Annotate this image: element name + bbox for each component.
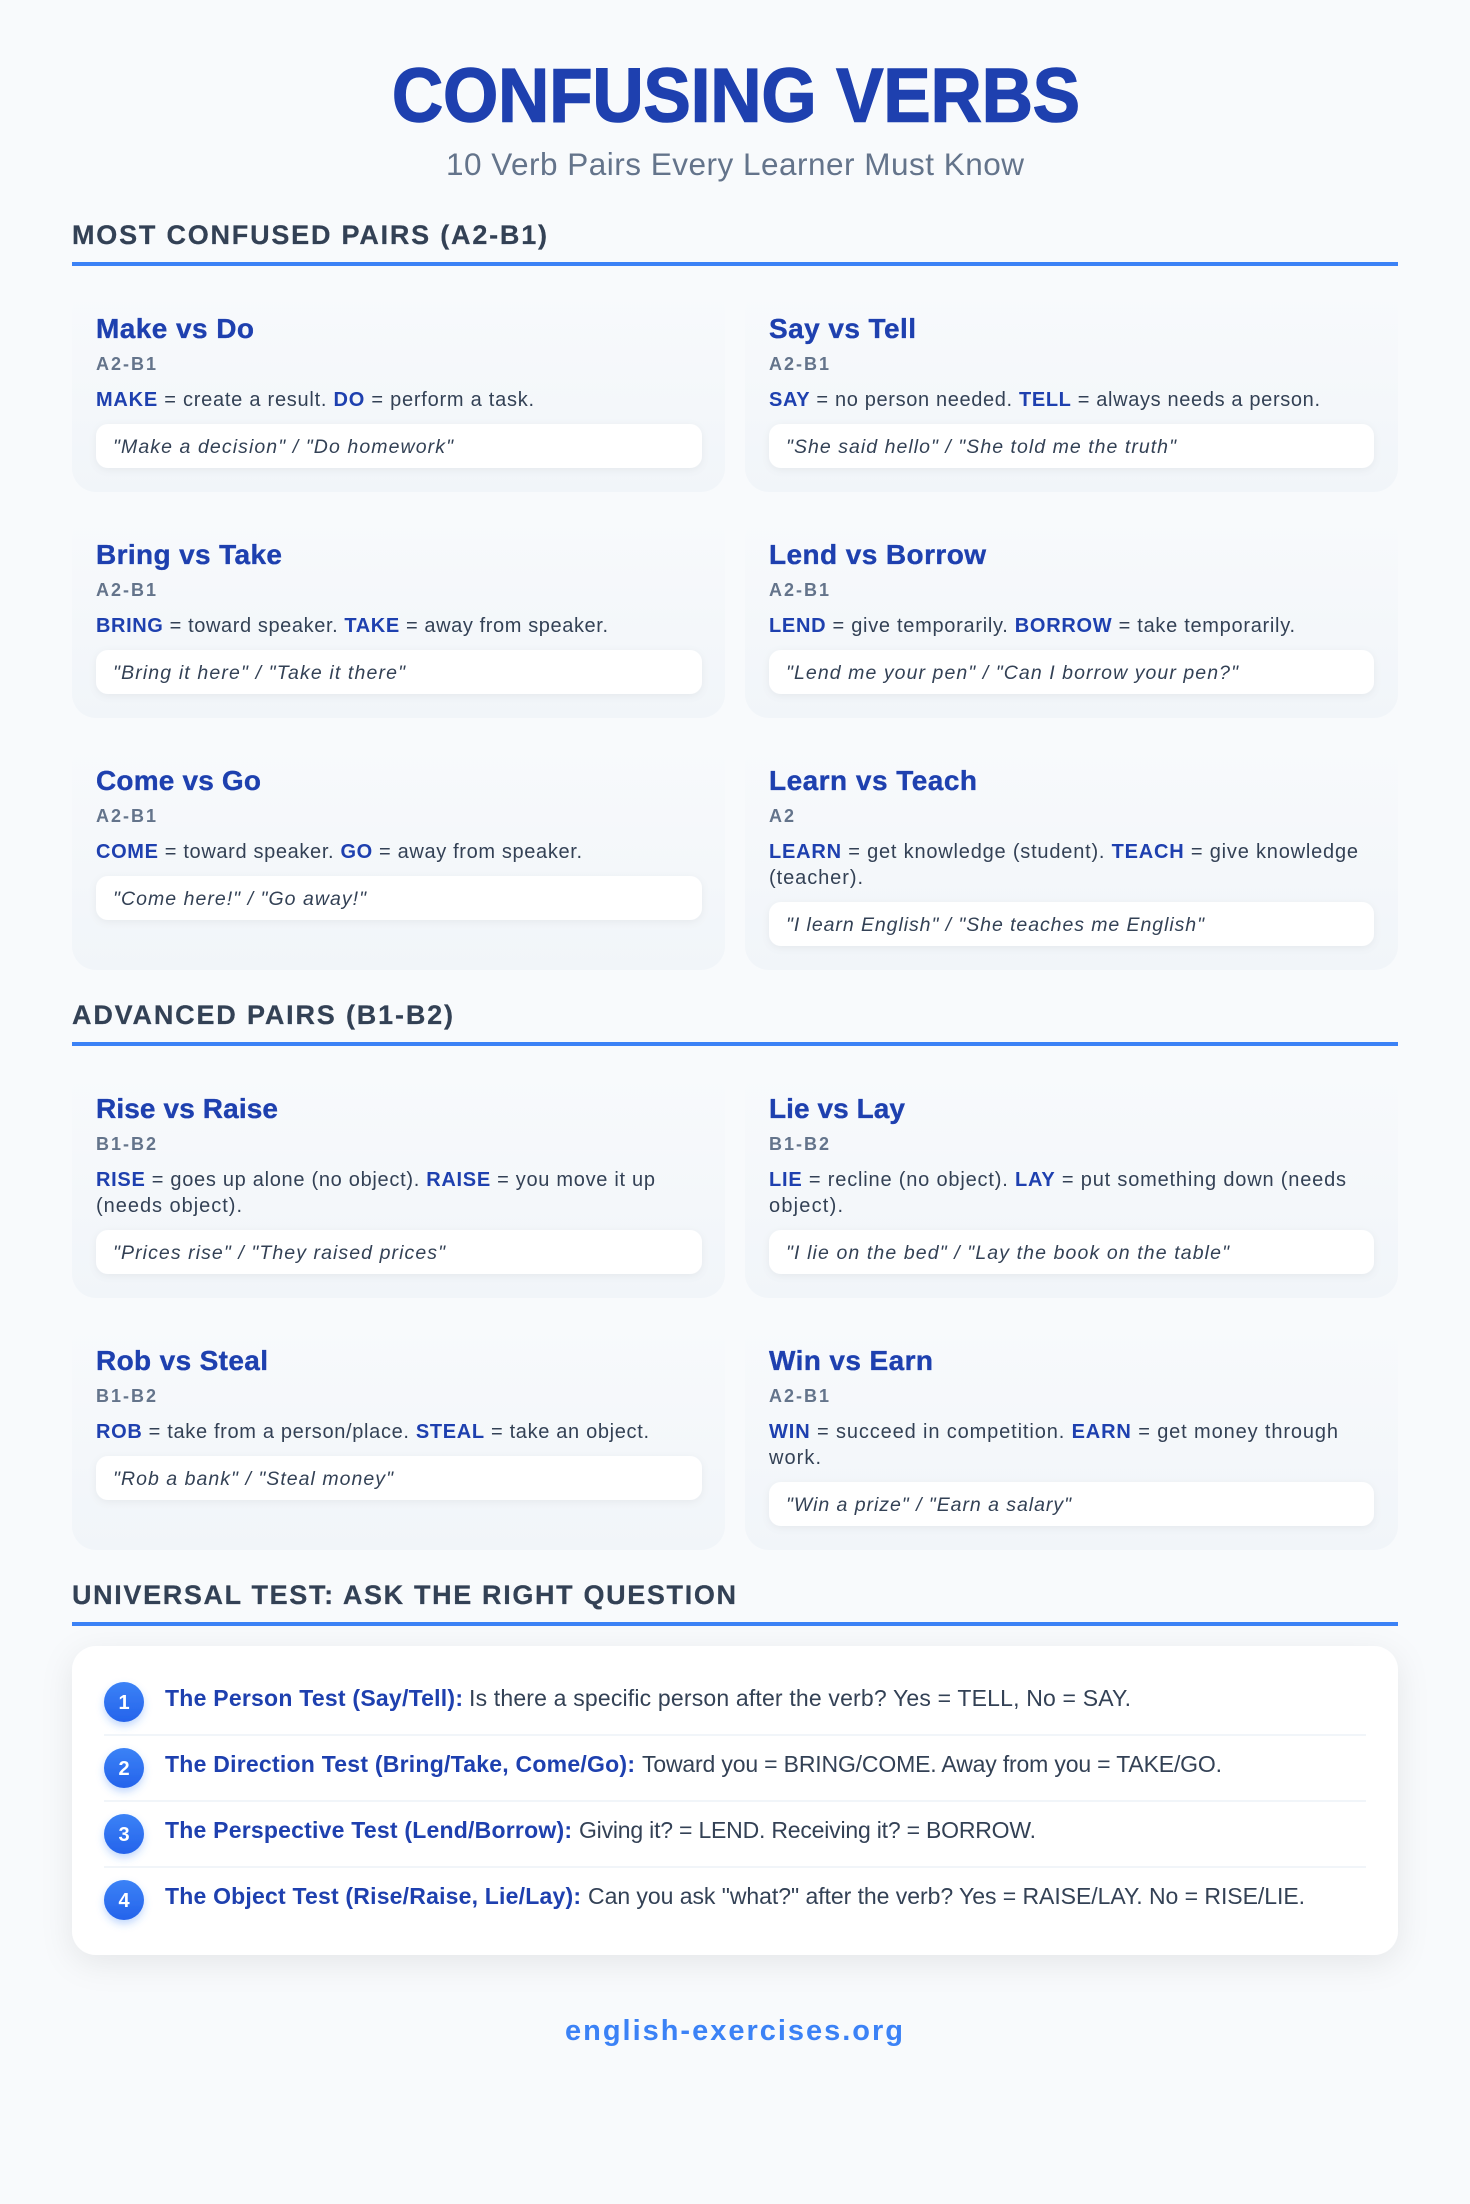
test 3: 3 (118, 1824, 130, 1846)
panel: lie vs lay: Lie vs Lay (769, 1093, 905, 1124)
panel: win vs earn: "Win a prize" / "Earn a salary" (786, 1494, 1072, 1516)
panel: make vs do: "Make a decision" / "Do homework" (113, 436, 454, 458)
panel: come vs go: COME = toward speaker. GO = away from speaker. (96, 841, 582, 863)
test 1: The Person Test (Say/Tell): (165, 1685, 463, 1711)
panel: bring vs take (72, 512, 725, 718)
panel: win vs earn: WIN = succeed in competition. EARN = get money through (769, 1421, 1338, 1443)
panel: lie vs lay: B1-B2 (769, 1134, 829, 1154)
panel: lie vs lay: object). (769, 1195, 843, 1217)
panel: rob vs steal: "Rob a bank" / "Steal money" (113, 1468, 394, 1490)
panel: lie vs lay: "I lie on the bed" / "Lay the book on the table" (786, 1242, 1230, 1264)
test 1: 1 (118, 1692, 130, 1714)
panel: universal test list (72, 1646, 1398, 1955)
panel: rise vs raise: Rise vs Raise (96, 1093, 278, 1124)
test 4 (104, 1880, 1305, 1920)
panel: make vs do: MAKE = create a result. DO = perform a task. (96, 389, 534, 411)
panel: lend vs borrow: "Lend me your pen" / "Can I borrow your pen?" (786, 662, 1239, 684)
panel: rise vs raise: RISE = goes up alone (no object). RAISE = you move it up (96, 1169, 655, 1191)
panel: say vs tell: Say vs Tell (769, 313, 916, 344)
panel: bring vs take: Bring vs Take (96, 539, 282, 570)
panel: rob vs steal (72, 1318, 725, 1550)
panel: rob vs steal: Rob vs Steal (96, 1345, 268, 1376)
panel: make vs do (72, 286, 725, 492)
test 1: Is there a specific person after the verb? Yes = TELL, No = SAY. (469, 1685, 1131, 1711)
panel: learn vs teach (745, 738, 1398, 970)
panel: rob vs steal: ROB = take from a person/place. STEAL = take an object. (96, 1421, 649, 1443)
panel: come vs go: A2-B1 (96, 806, 156, 826)
panel: learn vs teach: "I learn English" / "She teaches me English" (786, 914, 1205, 936)
panel: rise vs raise: B1-B2 (96, 1134, 156, 1154)
panel: learn vs teach: Learn vs Teach (769, 765, 977, 796)
panel: learn vs teach: A2 (769, 806, 794, 826)
panel: rise vs raise (72, 1066, 725, 1298)
subtitle: 10 Verb Pairs Every Learner Must Know (446, 146, 1024, 182)
panel: say vs tell (745, 286, 1398, 492)
panel: come vs go: Come vs Go (96, 765, 261, 796)
panel: win vs earn: A2-B1 (769, 1386, 829, 1406)
section heading: most confused pairs (72, 220, 1398, 266)
panel: lend vs borrow: LEND = give temporarily. BORROW = take temporarily. (769, 615, 1295, 637)
test 2: Toward you = BRING/COME. Away from you = TAKE/GO. (642, 1751, 1222, 1777)
test 4: Can you ask "what?" after the verb? Yes = RAISE/LAY. No = RISE/LIE. (588, 1883, 1305, 1909)
panel: make vs do: Make vs Do (96, 313, 254, 344)
panel: come vs go: "Come here!" / "Go away!" (113, 888, 367, 910)
test 1 (104, 1682, 1131, 1722)
panel: win vs earn: work. (768, 1447, 821, 1469)
panel: bring vs take: BRING = toward speaker. TAKE = away from speaker. (96, 615, 608, 637)
section heading: universal test (72, 1580, 1398, 1626)
panel: lie vs lay (745, 1066, 1398, 1298)
panel: learn vs teach: (teacher). (769, 867, 863, 889)
test 3: Giving it? = LEND. Receiving it? = BORROW. (579, 1817, 1036, 1843)
test 2: 2 (118, 1758, 130, 1780)
panel: lend vs borrow: A2-B1 (769, 580, 829, 600)
panel: lie vs lay: LIE = recline (no object). LAY = put something down (needs (769, 1169, 1346, 1191)
panel: say vs tell: A2-B1 (769, 354, 829, 374)
test 3: The Perspective Test (Lend/Borrow): (165, 1817, 572, 1843)
section heading: advanced pairs (72, 1000, 1398, 1046)
test 4: The Object Test (Rise/Raise, Lie/Lay): (165, 1883, 581, 1909)
panel: win vs earn (745, 1318, 1398, 1550)
test 3 (104, 1814, 1036, 1854)
panel: lend vs borrow: Lend vs Borrow (769, 539, 986, 570)
test 2: The Direction Test (Bring/Take, Come/Go): (165, 1751, 635, 1777)
panel: rise vs raise: (needs object). (96, 1195, 242, 1217)
test 2 (104, 1748, 1222, 1788)
panel: rise vs raise: "Prices rise" / "They raised prices" (113, 1242, 446, 1264)
panel: bring vs take: "Bring it here" / "Take it there" (113, 662, 406, 684)
section heading: universal test: UNIVERSAL TEST: ASK THE RIGHT QUESTION (72, 1580, 736, 1610)
section heading: advanced pairs: ADVANCED PAIRS (B1-B2) (72, 1000, 453, 1030)
section heading: most confused pairs: MOST CONFUSED PAIRS (A2-B1) (72, 220, 547, 250)
panel: say vs tell: "She said hello" / "She told me the truth" (786, 436, 1177, 458)
panel: lend vs borrow (745, 512, 1398, 718)
panel: win vs earn: Win vs Earn (769, 1345, 933, 1376)
test 4: 4 (118, 1890, 130, 1912)
title: CONFUSING VERBS (392, 54, 1080, 138)
panel: bring vs take: A2-B1 (96, 580, 156, 600)
footer link: english-exercises.org (565, 2015, 903, 2047)
panel: learn vs teach: LEARN = get knowledge (student). TEACH = give knowledge (769, 841, 1358, 863)
panel: say vs tell: SAY = no person needed. TELL = always needs a person. (769, 389, 1320, 411)
panel: come vs go (72, 738, 725, 970)
panel: make vs do: A2-B1 (96, 354, 156, 374)
panel: rob vs steal: B1-B2 (96, 1386, 156, 1406)
